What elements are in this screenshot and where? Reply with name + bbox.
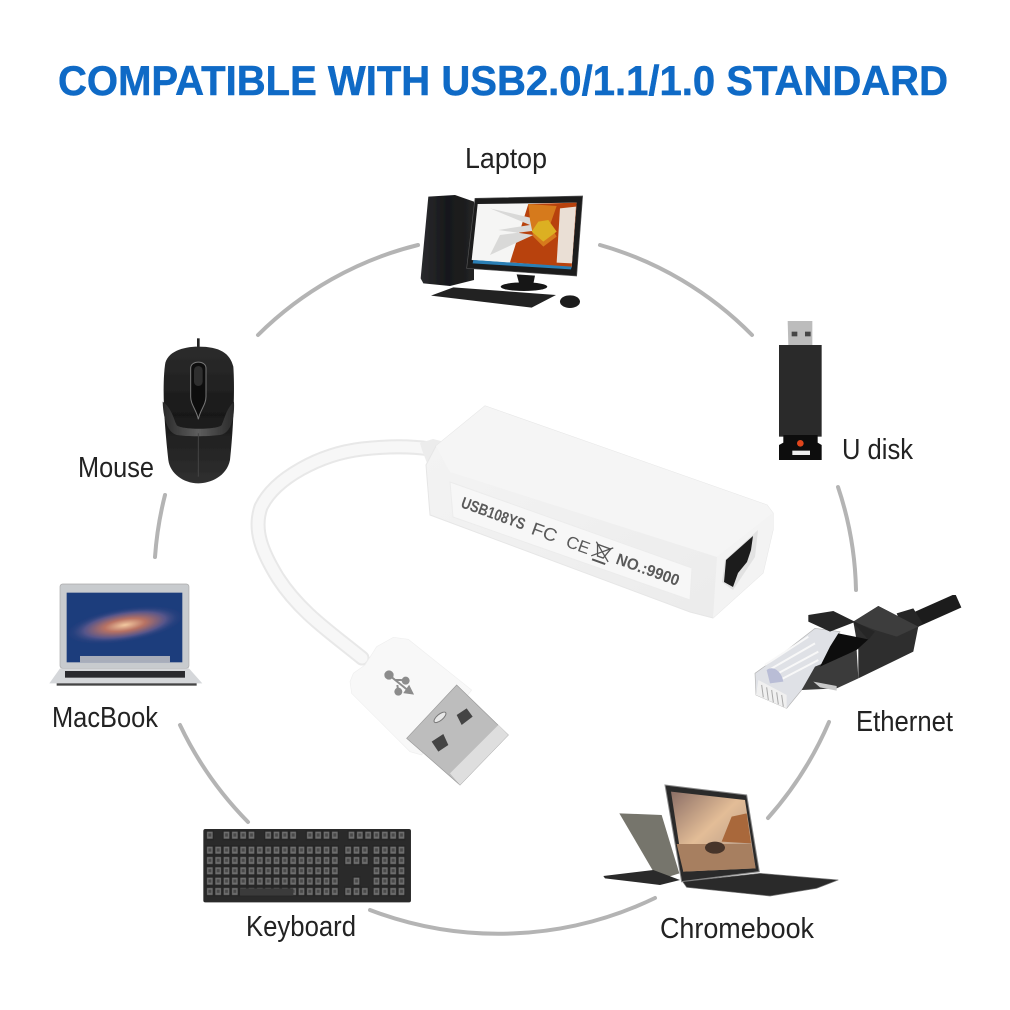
center seam xyxy=(197,433,200,477)
device: desktop computer xyxy=(421,195,583,308)
clip tab xyxy=(808,611,875,640)
label: U disk: U disk xyxy=(842,434,913,466)
monitor xyxy=(467,196,583,276)
base xyxy=(683,873,838,896)
label: Laptop: Laptop xyxy=(465,143,547,175)
metal clip xyxy=(813,682,837,691)
device: Ethernet cable xyxy=(755,601,958,708)
mouse xyxy=(560,295,580,308)
keyboard body xyxy=(203,829,411,902)
adapter body xyxy=(426,406,773,618)
key blocks xyxy=(206,830,406,897)
device: Chromebook xyxy=(603,785,838,896)
bottom strip xyxy=(57,683,197,686)
adapter strain relief xyxy=(420,439,441,467)
USB trident symbol xyxy=(385,671,412,695)
adapter cable xyxy=(258,447,430,658)
adapter label text xyxy=(458,493,682,591)
mouse cable xyxy=(194,338,202,348)
metal connector xyxy=(407,685,508,785)
monitor stand xyxy=(501,274,547,291)
screen xyxy=(671,792,756,872)
boot xyxy=(853,606,918,678)
title: COMPATIBLE WITH USB2.0/1.1/1.0 STANDARD xyxy=(58,57,948,104)
body xyxy=(779,345,822,437)
device: MacBook xyxy=(49,584,202,686)
plug xyxy=(788,321,812,345)
adapter label text: CE xyxy=(564,532,593,558)
base xyxy=(49,668,202,683)
label: Ethernet: Ethernet xyxy=(856,706,953,738)
device: U disk xyxy=(779,321,822,460)
front lid xyxy=(665,785,759,882)
shield xyxy=(802,650,858,690)
mouse band xyxy=(163,402,234,436)
label: MacBook: MacBook xyxy=(52,702,158,734)
connecting circle arcs xyxy=(155,245,856,934)
cable xyxy=(900,601,958,627)
label: Keyboard: Keyboard xyxy=(246,911,356,943)
transparent head xyxy=(755,628,840,708)
label: Chromebook: Chromebook xyxy=(660,913,814,945)
tower xyxy=(421,195,474,286)
keys xyxy=(65,671,185,678)
adapter label text: FC xyxy=(529,519,560,546)
central USB ethernet adapter xyxy=(258,406,773,785)
mouse body xyxy=(164,347,234,483)
scroll area xyxy=(191,362,206,419)
keyboard xyxy=(431,287,556,308)
adapter label text: NO.:9900 xyxy=(614,551,682,590)
device: keyboard xyxy=(203,829,411,902)
cap xyxy=(779,435,822,460)
latch recess xyxy=(820,633,868,667)
plug housing xyxy=(350,637,472,755)
screen xyxy=(65,593,185,662)
strain relief xyxy=(897,608,923,637)
lid xyxy=(60,584,189,668)
adapter label text: USB108YS xyxy=(459,495,528,534)
rear laptop xyxy=(603,813,680,885)
device: mouse xyxy=(163,338,234,483)
label: Mouse: Mouse xyxy=(78,452,154,484)
adapter RJ45 port xyxy=(722,530,758,590)
USB plug xyxy=(350,637,508,785)
spacebar xyxy=(240,888,293,896)
